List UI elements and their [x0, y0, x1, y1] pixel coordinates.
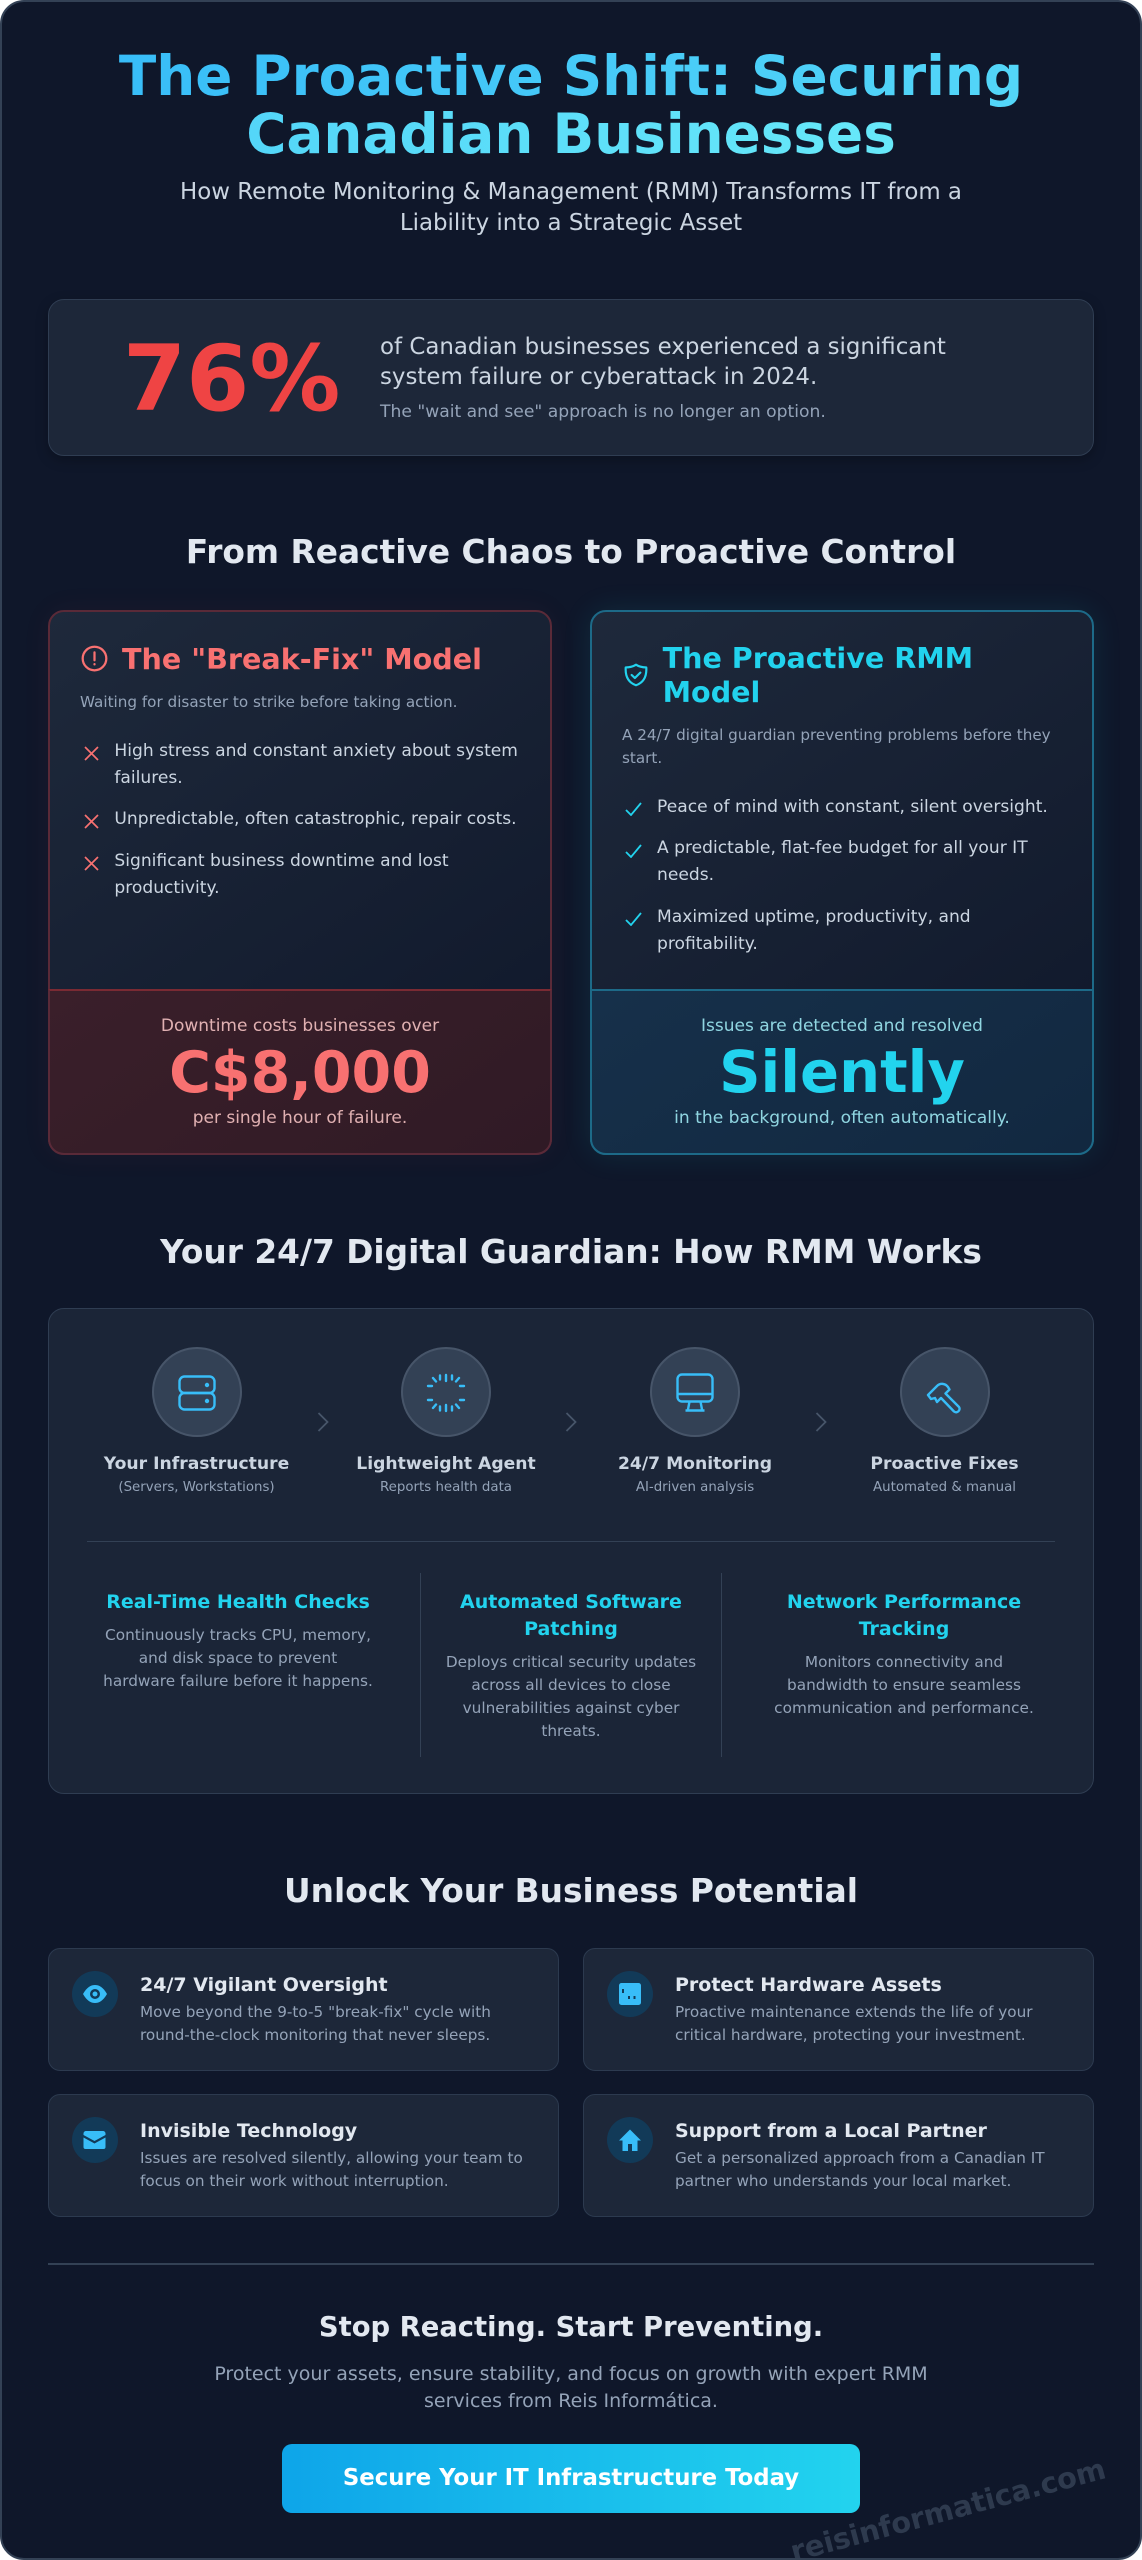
callout tail: per single hour of failure.: [193, 1108, 407, 1128]
call to action heading: Stop Reacting. Start Preventing.: [319, 2312, 823, 2343]
call to action button: Secure Your IT Infrastructure Today: [343, 2465, 799, 2491]
callout lead: Issues are detected and resolved: [701, 1016, 983, 1036]
card description: [140, 2146, 523, 2192]
card description: Get a personalized approach from a Canadian IT: [675, 2148, 1045, 2166]
step label: Your Infrastructure: [104, 1454, 289, 1474]
step: lightweight agent: [356, 1347, 536, 1495]
statistic note: The "wait and see" approach is no longer an option.: [380, 402, 826, 422]
item: flat-fee budget: needs.: [657, 865, 714, 885]
icon: house: [607, 2117, 653, 2163]
feature description: [446, 1652, 696, 1740]
card: invisible technology: [48, 2094, 559, 2217]
card: local partner: [583, 2094, 1094, 2217]
card description: [675, 2146, 1045, 2192]
title: Canadian Businesses: [246, 102, 896, 166]
feature description: threats.: [541, 1722, 601, 1740]
step detail: Reports health data: [380, 1480, 512, 1495]
step detail: (Servers, Workstations): [118, 1480, 275, 1495]
feature title: Network Performance: [787, 1591, 1021, 1613]
icon: wrench: [926, 1382, 961, 1414]
card title: Support from a Local Partner: [675, 2120, 987, 2142]
heading: reactive vs proactive: From Reactive Chaos to Proactive Control: [186, 533, 956, 571]
big number 76%: 76%: [123, 327, 340, 432]
icon: agent: [426, 1374, 466, 1412]
subtitle: How Remote Monitoring & Management (RMM) Transforms IT from a: [180, 179, 962, 205]
item: high stress: failures.: [114, 768, 183, 788]
item: flat-fee budget: [625, 838, 1028, 885]
call to action text: services from Reis Informática.: [424, 2390, 718, 2412]
statistic text: of Canadian businesses experienced a significant: [380, 334, 946, 360]
step: your infrastructure: [104, 1347, 289, 1495]
feature description: [103, 1626, 373, 1690]
step label: 24/7 Monitoring: [618, 1454, 772, 1474]
item: downtime: Significant business downtime and lost: [114, 851, 449, 871]
icon: server: [178, 1375, 216, 1411]
feature description: [774, 1652, 1034, 1716]
callout figure: C$8,000: [169, 1040, 431, 1106]
heading: business potential: Unlock Your Business Potential: [284, 1872, 858, 1910]
card description: Issues are resolved silently, allowing your team to: [140, 2148, 523, 2166]
feature description: Continuously tracks CPU, memory,: [105, 1626, 371, 1644]
item: downtime: [84, 851, 449, 898]
RMM description: [622, 726, 1051, 767]
step: proactive fixes: [870, 1347, 1019, 1495]
subtitle: [180, 179, 962, 236]
statistic text: system failure or cyberattack in 2024.: [380, 364, 817, 390]
item: downtime: productivity.: [114, 878, 220, 898]
card description: critical hardware, protecting your investment.: [675, 2026, 1026, 2044]
card: hardware assets: [583, 1948, 1094, 2071]
subtitle: Liability into a Strategic Asset: [400, 210, 742, 236]
callout lead: Downtime costs businesses over: [161, 1016, 439, 1036]
panel: break-fix model: [48, 610, 552, 1155]
feature description: and disk space to prevent: [139, 1648, 337, 1666]
step: monitoring: [618, 1347, 772, 1495]
step label: Lightweight Agent: [356, 1454, 536, 1474]
card description: round-the-clock monitoring that never sleeps.: [140, 2026, 490, 2044]
call to action text: Protect your assets, ensure stability, and focus on growth with expert RMM: [214, 2363, 928, 2385]
item: high stress: [84, 741, 518, 788]
feature description: bandwidth to ensure seamless: [787, 1676, 1021, 1694]
statistic text: [380, 334, 946, 390]
call to action button: [282, 2444, 860, 2513]
icon: monitor: [676, 1373, 714, 1412]
callout word: Silently: [719, 1039, 965, 1106]
feature description: vulnerabilities against cyber: [463, 1698, 679, 1716]
feature title: Real-Time Health Checks: [106, 1591, 370, 1613]
feature title: [787, 1591, 1021, 1640]
item: maximized uptime: profitability.: [657, 934, 758, 954]
RMM heading: The Proactive RMM: [663, 641, 973, 675]
panel: key statistic: [48, 299, 1094, 456]
item: high stress: High stress and constant anxiety about system: [114, 741, 518, 761]
feature title: Automated Software: [460, 1591, 682, 1613]
card description: Proactive maintenance extends the life of your: [675, 2002, 1033, 2020]
icon: hardware: [607, 1971, 653, 2017]
feature title: Tracking: [859, 1618, 949, 1640]
heading: how RMM works: Your 24/7 Digital Guardian: How RMM Works: [160, 1232, 982, 1270]
RMM description: start.: [622, 749, 662, 767]
card title: Invisible Technology: [140, 2120, 357, 2142]
arrow: [318, 1412, 328, 1432]
item: peace of mind: Peace of mind with constant, silent oversight.: [657, 797, 1048, 817]
list: break-fix drawbacks: [84, 741, 518, 898]
card: vigilant oversight: [48, 1948, 559, 2071]
RMM heading: Model: [663, 675, 760, 709]
panel: how RMM works: [48, 1308, 1094, 1794]
card description: partner who understands your local market.: [675, 2172, 1011, 2190]
step detail: AI-driven analysis: [636, 1480, 754, 1495]
call to action text: [0, 2361, 1142, 2414]
card description: Move beyond the 9-to-5 "break-fix" cycle with: [140, 2002, 491, 2020]
card title: Protect Hardware Assets: [675, 1974, 942, 1996]
card description: [675, 2000, 1033, 2046]
feature: software patching: [446, 1591, 696, 1740]
item: maximized uptime: Maximized uptime, productivity, and: [657, 907, 971, 927]
callout: silent resolution: [590, 989, 1094, 1155]
feature description: Monitors connectivity and: [805, 1652, 1003, 1670]
callout tail: in the background, often automatically.: [674, 1108, 1010, 1128]
card description: focus on their work without interruption.: [140, 2172, 449, 2190]
item: flat-fee budget: A predictable, flat-fee budget for all your IT: [657, 838, 1028, 858]
step detail: Automated & manual: [873, 1480, 1016, 1495]
icon: shield check: [624, 664, 648, 686]
break-fix description: Waiting for disaster to strike before taking action.: [80, 693, 457, 711]
card title: 24/7 Vigilant Oversight: [140, 1974, 388, 1996]
title: [119, 44, 1023, 166]
callout: downtime cost: [48, 989, 552, 1155]
arrow: [816, 1412, 826, 1432]
icon: envelope: [72, 2117, 118, 2163]
feature: network tracking: [774, 1591, 1034, 1716]
feature description: hardware failure before it happens.: [103, 1672, 373, 1690]
feature description: across all devices to close: [471, 1676, 671, 1694]
RMM heading: [662, 641, 973, 709]
feature: health checks: [103, 1591, 373, 1690]
feature description: communication and performance.: [774, 1698, 1034, 1716]
icon: eye: [72, 1971, 118, 2017]
icon: warning circle: [82, 646, 108, 672]
feature description: Deploys critical security updates: [446, 1652, 696, 1670]
card description: [140, 2002, 491, 2044]
panel: proactive RMM model: [588, 608, 1096, 1157]
step label: Proactive Fixes: [870, 1454, 1019, 1474]
break-fix heading: The "Break-Fix" Model: [122, 642, 482, 676]
item: repair costs: Unpredictable, often catastrophic, repair costs.: [114, 809, 517, 829]
feature title: [460, 1591, 682, 1640]
title: The Proactive Shift: Securing: [119, 44, 1023, 108]
list: RMM benefits: [625, 797, 1048, 954]
item: maximized uptime: [625, 907, 971, 954]
arrow: [566, 1412, 576, 1432]
feature title: Patching: [524, 1618, 618, 1640]
RMM description: A 24/7 digital guardian preventing problems before they: [622, 726, 1051, 744]
